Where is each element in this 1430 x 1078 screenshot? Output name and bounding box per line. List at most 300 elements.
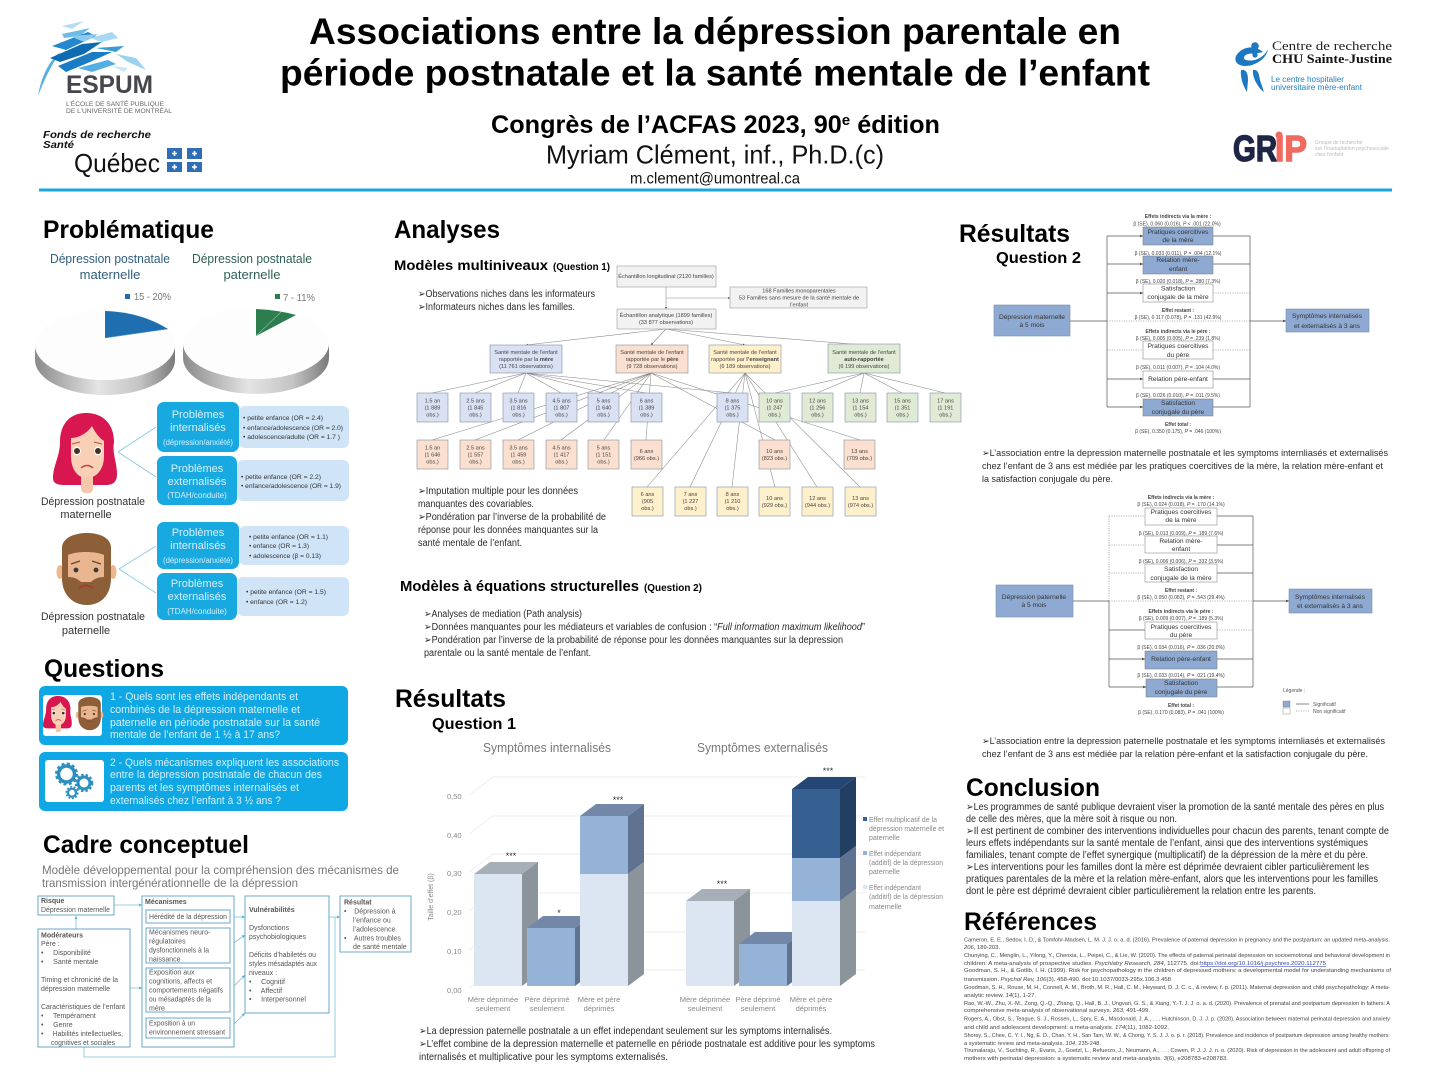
subheading: Question 1: Question 1 (432, 716, 516, 733)
panel: analyses (394, 216, 961, 659)
mediators and coefficients: Effets indirects via le père : (1148, 609, 1214, 615)
mediators and coefficients: Effet restant : (1162, 308, 1194, 314)
top boxes: 168 Familles monoparentales (762, 288, 836, 294)
mediators and coefficients: β (SE), 0.060 (0.016), P < .001 (22.0%) (1133, 222, 1221, 228)
box: vulnérabilités: • Interpersonnel (249, 996, 306, 1004)
row 1 age boxes: obs.) (512, 413, 525, 419)
mediators and coefficients: Pratiques coercitives (1148, 343, 1209, 350)
x axis labels: seulement (688, 1004, 723, 1013)
conclusion text: pratiques parentales de la mère et la relation mère-enfant, alors que les interventions pour les familles (966, 874, 1378, 885)
informant boxes: Santé mentale de l’enfant (494, 350, 558, 356)
subheading: équations structurelles: Modèles à équations structurelles (400, 578, 639, 595)
reference list: Goodman, S. H., Rouse, M. H., Connell, A. M., Broth, M. R., Hall, C. M., Heyward, D. J. C. c., & review, f. p. (2011). Maternal depression and child psychopathology: A meta- (964, 985, 1390, 991)
mediators and coefficients: Relation père-enfant (1151, 656, 1211, 663)
mediators and coefficients: Pratiques coercitives (1151, 624, 1212, 631)
card: maternal internalised: internalisés (170, 422, 226, 434)
box: résultat: • Autres troubles (344, 936, 401, 942)
box: résultat (340, 896, 411, 952)
text: maternal mediation finding: ➢L’association entre la depression maternelle postnatale et les symptoms internliasés et externalisés (982, 448, 1388, 459)
mediators and coefficients: Effets indirects via la mère : (1148, 495, 1215, 501)
conclusion text (966, 802, 1389, 897)
top boxes: (33 877 observations) (639, 320, 693, 326)
mediators and coefficients: β (SE), 0.006 (0.006), P = .332 (3.5%) (1139, 559, 1224, 565)
informant boxes: (11 761 observations) (499, 364, 553, 370)
box: vulnérabilités (245, 896, 329, 1013)
panel: cadre conceptuel (38, 831, 411, 1057)
box: vulnérabilités: • Affectif (249, 988, 282, 995)
text: paternal mediation finding (982, 736, 1385, 760)
row 1 age boxes: (1 247 (767, 406, 782, 412)
mediators and coefficients: β (SE), 0.170 (0.083), P = .041 (100%) (1138, 710, 1224, 716)
outcome box (1286, 309, 1369, 332)
logo: GRIP: GR (1233, 128, 1277, 169)
box: mécanismes (142, 896, 234, 1047)
bar: mother only internalised (474, 862, 538, 986)
pie title: paternal: Dépression postnatale (192, 251, 312, 266)
row 2 age boxes: 4.5 ans (552, 446, 571, 452)
box: résultat: de santé mentale (353, 944, 407, 951)
box: modérateurs: dépression maternelle (41, 986, 110, 993)
informant boxes: rapportée par la mère (499, 357, 553, 363)
mediators and coefficients: Satisfaction (1164, 566, 1198, 573)
logo: GRIP (1233, 128, 1389, 169)
mediators and coefficients: conjugale de la mère (1150, 575, 1212, 582)
box: résultat: l’enfance ou (353, 918, 391, 924)
exposure box (994, 305, 1070, 336)
diagram legend: Non significatif (1313, 709, 1346, 715)
outcome box (1289, 589, 1372, 613)
card: maternal externalised (157, 456, 349, 505)
row 1 age boxes: obs.) (426, 413, 439, 419)
card: paternal internalised (157, 522, 349, 569)
reference list: Rogers, A., Obst, S., Teague, S. J., Rossen, L., Spry, E. A., Macdonald, J. A., . . . Hutchinson, D. J. J. p. (2020). Association between maternal perinatal depression and anxiety (964, 1016, 1390, 1022)
heading: Analyses: Analyses (394, 216, 500, 244)
row 1 age boxes: 8 ans (726, 399, 740, 405)
row 2 age boxes: obs.) (555, 460, 568, 466)
conclusion text: ➢Il est pertinent de combiner des interventions individuelles pour chacun des parents, tenant compte de (966, 826, 1389, 837)
panel: questions (39, 655, 348, 811)
mediators and coefficients: conjugale du père (1152, 409, 1205, 416)
logo subtitle: DE L’UNIVERSITÉ DE MONTRÉAL (66, 106, 172, 115)
top boxes: Échantillon analytique (1899 familles) (620, 312, 712, 319)
row 3 age boxes: 13 ans (852, 496, 869, 502)
question 1 (39, 686, 348, 745)
bullets: path analysis (424, 609, 865, 659)
row 1 age boxes: 13 ans (852, 399, 869, 405)
mediators and coefficients: conjugale de la mère (1147, 294, 1209, 301)
box: mécanismes: Mécanismes (145, 899, 187, 906)
card: paternal internalised: Problèmes (172, 527, 225, 539)
sub-box: neuro: Mécanismes neuro- (149, 930, 211, 936)
bullets: path analysis: ➢Données manquantes pour les médiateurs et variables de confusion : “Full information maximum likelihood” (424, 622, 865, 633)
card: paternal externalised (157, 573, 349, 620)
pie chart: maternal 15-20% (35, 292, 175, 395)
logo: Fonds de recherche Santé Québec: Québec (74, 148, 160, 178)
author: Myriam Clément, inf., Ph.D.(c) (546, 140, 884, 170)
row 2 age boxes: 3.5 ans (509, 446, 528, 452)
label: maternal depression: maternelle (60, 509, 112, 521)
chart legend (863, 817, 944, 911)
row 1 age boxes: (1 375 (725, 406, 740, 412)
top boxes: l’enfant (790, 302, 808, 308)
significance stars: *** (506, 851, 517, 861)
box: vulnérabilités: niveaux : (249, 970, 277, 977)
mediators and coefficients: β (SE), 0.024 (0.018), P = .170 (14.1%) (1137, 502, 1225, 508)
box: modérateurs: • Tempérament (41, 1013, 96, 1020)
question 1: mentale de l’enfant de 1 ½ à 17 ans? (110, 729, 280, 741)
mediators and coefficients: Relation mère- (1159, 538, 1203, 545)
heading: Problématique: Problématique (43, 216, 214, 244)
sub-box: neuro (146, 928, 230, 964)
heading: Conclusion: Conclusion (966, 774, 1100, 802)
row 1 age boxes: obs.) (939, 413, 952, 419)
sub-box: exposition cognitions: ou mésadaptés de la (149, 996, 211, 1004)
subheading: modèles multiniveaux: Modèles multiniveaux (394, 257, 548, 273)
lines (1073, 516, 1289, 687)
conclusion text: leurs effets indépendants sur la santé mentale de l’enfant, ainsi que des interventions systémiques (966, 838, 1368, 849)
reference list: mothers with perinatal depression: a systematic review and meta-analysis. 3(6), e208783-e208783. (964, 1056, 1228, 1062)
row 2 age boxes: obs.) (512, 460, 525, 466)
mediators and coefficients: β (SE), 0.117 (0.078), P = .131 (42.9%) (1135, 315, 1222, 321)
text: paternal mediation finding: ➢L’association entre la depression paternelle postnatale et les symptoms internliasés et externalisés (982, 736, 1385, 747)
row 3 age boxes: (905 (642, 499, 653, 505)
bullets: missing data: réponse pour les données manquantes sur la (418, 525, 598, 536)
chart heading: externalised: Symptômes externalisés (697, 741, 828, 755)
exposure box (996, 585, 1073, 617)
mediators and coefficients: Relation père-enfant (1148, 376, 1208, 383)
row 2 age boxes: obs.) (597, 460, 610, 466)
row 1 age boxes: 12 ans (809, 399, 826, 405)
x axis labels: Mère et père (790, 995, 832, 1004)
mediators and coefficients: Effet restant : (1165, 588, 1197, 594)
stacked 3D bar chart (428, 766, 944, 1013)
bullets: missing data (418, 486, 606, 549)
pie title: maternal (50, 251, 170, 282)
chart legend: Effet indépendant (869, 851, 921, 858)
label: maternal depression (41, 496, 145, 521)
top boxes: Échantillon longitudinal (2120 familles) (618, 273, 714, 280)
mediators and coefficients: β (SE), 0.009 (0.007), P = .189 (5.3%) (1139, 616, 1224, 622)
box: risque: Risque (41, 898, 64, 905)
title: période postnatale et la santé mentale de l’enfant (280, 52, 1150, 94)
significance stars: *** (613, 795, 624, 805)
box: résultat: l’adolescence (353, 926, 396, 934)
row 3 age boxes: 6 ans (641, 492, 655, 498)
subheading: modèles multiniveaux: (Question 1) (553, 262, 610, 273)
box: vulnérabilités: Déficits d’habiletés ou (249, 952, 316, 959)
row 1 age boxes: 1.5 an (425, 399, 440, 405)
logo subtitle (66, 99, 172, 115)
text: paternal mediation finding: chez l’enfant de 3 ans est médiée par la relation père-enfant et la satisfaction conjugale du père. (982, 749, 1368, 760)
box: résultat: • Dépression à (344, 908, 396, 916)
sub-box: hérédité: Hérédité de la dépression (149, 914, 227, 921)
box: vulnérabilités: Dysfonctions (249, 925, 290, 932)
mediators and coefficients: Effet total : (1168, 703, 1194, 709)
bullets: levels (418, 289, 595, 313)
subheading: équations structurelles: (Question 2) (644, 583, 702, 594)
informant boxes: (6 189 observations) (720, 364, 771, 370)
box: modérateurs: Caractéristiques de l’enfant (41, 1004, 125, 1011)
mediators and coefficients: Relation mère- (1156, 257, 1200, 264)
question 2: 2 - Quels mécanismes expliquent les associations (110, 757, 339, 769)
mediators and coefficients: Effet total : (1165, 422, 1191, 428)
row 2 age boxes: obs.) (469, 460, 482, 466)
x axis labels: Mère déprimée (680, 995, 730, 1004)
exposure box: Dépression maternelle (999, 314, 1065, 321)
row 1 age boxes: 17 ans (937, 399, 954, 405)
x axis labels: seulement (476, 1004, 511, 1013)
chart legend: dépression maternelle et (869, 826, 944, 833)
bar: father only externalised (739, 932, 803, 986)
conclusion text: familiales, tenant compte de l’effet synergique (multiplicatif) de la dépression de la mère et du père. (966, 850, 1368, 861)
reference list: Chunying, C., Menglin, L., Yilong, Y., Chenxia, L., Peipei, C., & Lie, W. (2020). The effects of paternal perinatal depression on socioemotional and behavioral development in (964, 953, 1390, 959)
bullets: path analysis: ➢Analyses de mediation (Path analysis) (424, 609, 582, 620)
row 1 age boxes: (1 389 (639, 406, 654, 412)
outcome box: Symptômes internalisés (1292, 313, 1363, 320)
row 1 age boxes: obs.) (640, 413, 653, 419)
row 3 age boxes: (929 obs.) (762, 503, 787, 509)
question 2: parents et les symptômes internalisés et (110, 782, 299, 794)
pie chart: paternal 7-11% (183, 293, 329, 394)
chart legend: Effet indépendant (869, 885, 921, 892)
mediation diagram: paternal (996, 495, 1372, 716)
mediators and coefficients (1133, 214, 1222, 435)
label: maternal depression: Dépression postnatale (41, 496, 145, 508)
logo: CHU Sainte-Justine: CHU Sainte-Justine (1272, 51, 1392, 66)
row 2 age boxes: 5 ans (597, 446, 611, 452)
bar: both parents externalised (792, 777, 856, 986)
row 1 age boxes: 6 ans (640, 399, 654, 405)
question 2 (39, 752, 348, 811)
card: paternal externalised: externalisés (168, 591, 227, 603)
text: maternal mediation finding (982, 448, 1388, 485)
bullets: path analysis: ➢Pondération par l’inverse de la probabilité de réponse pour les données manquantes sur la depression (424, 635, 843, 646)
mediators and coefficients: Effets indirects via la mère : (1145, 214, 1212, 220)
mediators and coefficients: β (SE), 0.026 (0.010), P = .011 (9.5%) (1136, 393, 1220, 399)
informant boxes: auto-rapportée (844, 357, 884, 363)
question 2: entre la dépression postnatale de chacun des (110, 769, 322, 781)
card: maternal internalised: (dépression/anxiété) (163, 438, 233, 447)
significance stars: *** (823, 766, 834, 776)
box: risque (38, 896, 114, 915)
row 3 age boxes: obs.) (684, 506, 697, 512)
mediators and coefficients: β (SE), 0.011 (0.007), P = .104 (4.0%) (1136, 365, 1220, 371)
y axis labels: 0,40 (447, 831, 462, 840)
row 3 age boxes (632, 487, 876, 516)
row 2 age boxes: (1 417 (554, 453, 569, 459)
x axis labels: déprimés (584, 1004, 615, 1013)
mediators and coefficients: enfant (1172, 546, 1190, 553)
bullets: missing data: ➢Pondération par l’inverse de la probabilité de (418, 512, 606, 523)
heading: Références: Références (964, 908, 1097, 936)
box: vulnérabilités: styles mésadaptés aux (249, 961, 317, 968)
subheading: Question 2: Question 2 (996, 250, 1081, 267)
logo: GRIP: IP (1275, 128, 1307, 169)
panel: références (963, 908, 1391, 1062)
diagram legend (1283, 688, 1346, 715)
icon: mother face (53, 413, 117, 493)
row 1 age boxes: (1 191 (938, 406, 953, 412)
row 1 age boxes: 10 ans (766, 399, 783, 405)
text: findings question 1: ➢La depression paternelle postnatale a un effet independant seulement sur les symptoms internalisés. (419, 1026, 832, 1037)
email: m.clement@umontreal.ca (630, 170, 800, 188)
sub-box: neuro: dysfonctionnels à la (149, 948, 209, 954)
row 2 age boxes: (1 557 (468, 453, 483, 459)
row 1 age boxes: obs.) (768, 413, 781, 419)
card: maternal internalised: • enfance/adolescence (OR = 2.0) (243, 425, 343, 432)
chart legend: maternelle (869, 904, 902, 911)
box: vulnérabilités: psychobiologiques (249, 934, 306, 941)
card: paternal externalised: (TDAH/conduite) (167, 607, 227, 616)
row 2 age boxes: (966 obs.) (634, 456, 659, 462)
mediators and coefficients: β (SE), 0.013 (0.009), P = .189 (7.6%) (1139, 531, 1224, 537)
x axis labels: Mère déprimée (468, 995, 518, 1004)
outcome box: et externalisés à 3 ans (1297, 603, 1364, 610)
sub-box: neuro: régulatoires (149, 938, 186, 946)
mediators and coefficients: conjugale du père (1155, 689, 1208, 696)
conclusion text: de celle des mères, que la mère soit à risque ou non. (966, 814, 1177, 825)
mediators and coefficients: du père (1170, 632, 1193, 639)
panel: résultats question 2 (959, 214, 1388, 760)
exposure box: à 5 mois (1020, 322, 1045, 329)
reference list: a systematic review and meta-analysis. 104, 235-248. (964, 1041, 1101, 1047)
row 1 age boxes: (1 807 (554, 406, 569, 412)
subtitle: congress: e (842, 112, 850, 129)
x axis labels: Mère et père (578, 995, 620, 1004)
sub-box: exposition cognitions: comportements négatifs (149, 988, 223, 994)
chart legend: paternelle (869, 869, 900, 876)
mediators and coefficients: β (SE), 0.350 (0.175), P = .046 (100%) (1135, 429, 1221, 435)
top boxes (617, 266, 867, 329)
reference list: transmission. Psychol Rev, 106 (3), 458-490. doi:10.1037/0033-295x.106.3.458 (964, 977, 1171, 983)
bullets: levels: ➢Observations niches dans les informateurs (418, 289, 595, 300)
bullets: path analysis: parentale ou la santé mentale de l’enfant. (424, 648, 591, 659)
bullets: missing data: manquantes des covariables. (418, 499, 534, 510)
logo: CHU Sainte-Justine: Le centre hospitalier (1271, 75, 1344, 84)
row 1 age boxes (417, 393, 961, 422)
reference list: 206, 189-203. (963, 945, 1000, 951)
text: findings question 1 (419, 1026, 875, 1063)
pie title: maternal: Dépression postnatale (50, 251, 170, 266)
text: maternal mediation finding: chez l’enfant de 3 ans est médiée par les pratiques coercitives de la mère, la relation mère-enfant et (982, 461, 1383, 472)
card: maternal externalised: • petite enfance (OR = 2.2) (241, 474, 321, 481)
panel: résultats question 1 (395, 685, 944, 1063)
x axis labels: Père déprimé (735, 995, 781, 1004)
informant boxes: rapportée par l’enseignant (711, 357, 779, 363)
row 3 age boxes: 7 ans (684, 492, 698, 498)
text: findings question 1: internalisés et multiplicative pour les symptoms externalisés. (419, 1052, 668, 1063)
heading: Résultats: Résultats (959, 220, 1070, 248)
informant boxes (490, 344, 900, 373)
pie chart: maternal 15-20%: 15 - 20% (134, 292, 171, 303)
row 1 age boxes: (1 845 (468, 406, 483, 412)
row 1 age boxes: (1 640 (596, 406, 611, 412)
logo: Fonds de recherche Santé Québec: Fonds de recherche (43, 129, 151, 141)
box: modérateurs: • Habilités intellectuelles, (41, 1031, 123, 1038)
pie title: paternal (192, 251, 312, 282)
box: modérateurs: • Disponibilité (41, 950, 91, 957)
row 1 age boxes: obs.) (555, 413, 568, 419)
sub-box: exposition cognitions: mère (149, 1006, 165, 1012)
row 1 age boxes: 4.5 ans (552, 399, 571, 405)
y axis labels: 0,10 (447, 947, 462, 956)
row 3 age boxes: (974 obs.) (848, 503, 873, 509)
card: paternal internalised: • petite enfance (OR = 1.1) (249, 534, 328, 541)
row 1 age boxes: 3.5 ans (509, 399, 528, 405)
logo: CHU Sainte-Justine: universitaire mère-enfant (1271, 83, 1363, 92)
chart legend: (additif) de la dépression (869, 894, 943, 901)
question 1: paternelle en période postnatale sur la santé (110, 717, 320, 729)
question 2: externalisés chez l’enfant à 3 ½ ans ? (110, 795, 281, 807)
box: vulnérabilités: • Cognitif (249, 979, 285, 986)
y axis labels: 0,20 (447, 908, 462, 917)
card: paternal internalised: • adolescence (β = 0.13) (249, 553, 321, 560)
mediators and coefficients (1137, 495, 1225, 716)
panel: problématique (35, 216, 349, 637)
row 3 age boxes: 10 ans (766, 496, 783, 502)
informant boxes: rapportée par le père (626, 357, 678, 363)
chart heading: internalised: Symptômes internalisés (483, 741, 611, 755)
diagram legend: Significatif (1313, 702, 1336, 708)
y axis labels: 0,00 (447, 986, 462, 995)
row 2 age boxes: (709 obs.) (847, 456, 872, 462)
chart legend: Effet multiplicatif de la (869, 817, 937, 824)
panel: conclusion (966, 774, 1389, 897)
card: paternal externalised: • petite enfance (OR = 1.5) (246, 589, 326, 596)
row 3 age boxes: obs.) (641, 506, 654, 512)
logo: CHU Sainte-Justine (1235, 38, 1392, 92)
mediators and coefficients: β (SE), 0.005 (0.005), P = .239 (1.8%) (1136, 336, 1221, 342)
axis title: Taille d’effet (β) (428, 873, 435, 921)
card: paternal externalised: Problèmes (171, 578, 224, 590)
question 1: 1 - Quels sont les effets indépendants et (110, 691, 298, 703)
label: paternal depression (41, 611, 145, 637)
mediators and coefficients: Satisfaction (1164, 680, 1198, 687)
subtitle: congress: édition (850, 111, 940, 139)
mediators and coefficients: de la mère (1165, 517, 1197, 524)
row 2 age boxes: (823 obs.) (762, 456, 787, 462)
row 3 age boxes: (1 227 (683, 499, 698, 505)
y axis labels: 0,30 (447, 869, 462, 878)
row 1 age boxes: obs.) (726, 413, 739, 419)
row 2 age boxes: obs.) (426, 460, 439, 466)
outcome box: Symptômes internalisés (1295, 594, 1366, 601)
logo: CHU Sainte-Justine: Centre de recherche (1272, 38, 1392, 53)
pie title: paternal: paternelle (223, 267, 281, 282)
x axis labels: seulement (530, 1004, 565, 1013)
row 2 age boxes: 13 ans (851, 449, 868, 455)
card: paternal externalised: • enfance (OR = 1.2) (246, 599, 307, 606)
box: modérateurs: Timing et chronicité de la (41, 977, 118, 984)
card: maternal externalised: externalisés (168, 476, 227, 488)
significance stars (506, 766, 834, 918)
card: maternal internalised: • petite enfance (OR = 2.4) (243, 415, 323, 422)
row 2 age boxes (417, 440, 875, 469)
pie title: maternal: maternelle (80, 267, 140, 282)
title: Associations entre la dépression parentale en (309, 11, 1121, 52)
bullets: levels: ➢Informateurs niches dans les familles. (418, 302, 575, 313)
subtitle: model: transmission intergénérationnelle de la dépression (42, 876, 298, 890)
conclusion text: dont le père est déprimé devraient cibler particulièrement la relation entre les parents. (966, 886, 1316, 897)
text: maternal mediation finding: la satisfaction conjugale du père. (982, 474, 1113, 485)
reference list: comprehensive meta-analysis of observational surveys. 263, 491-499. (964, 1008, 1150, 1014)
row 2 age boxes: (1 646 (425, 453, 440, 459)
diagram legend: Légende : (1283, 688, 1305, 694)
mediators and coefficients: β (SE), 0.020 (0.018), P = .280 (7.3%) (1136, 279, 1221, 285)
subtitle: congress: Congrès de l’ACFAS 2023, 90 (491, 111, 838, 139)
title (280, 11, 1150, 94)
card: maternal externalised: (TDAH/conduite) (167, 491, 227, 500)
